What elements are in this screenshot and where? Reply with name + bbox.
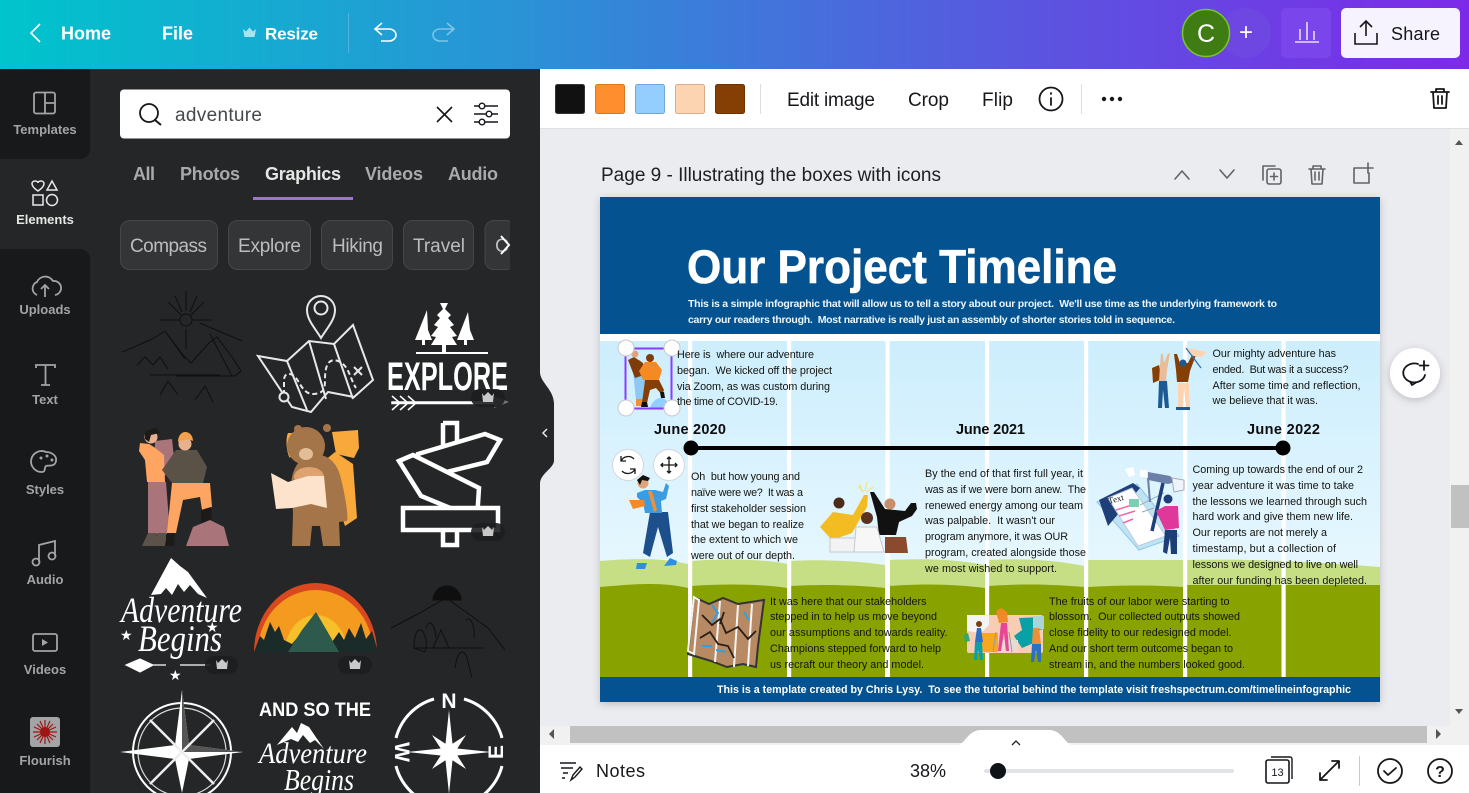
text block: young and naive: Oh but how young and: [691, 471, 800, 483]
text block: first full year: was palpable. It wasn't our: [924, 515, 1055, 527]
icon: check: [1378, 759, 1402, 783]
text item: Text: [32, 392, 59, 407]
icon: fullscreen: [1320, 761, 1339, 780]
text block: first full year: [924, 468, 1086, 575]
image toolbar: [540, 69, 1469, 129]
graphic: folded map with pin: [258, 296, 373, 412]
illustration: puzzle team: [964, 608, 1044, 662]
flourish item: Flourish: [19, 753, 71, 768]
text block: stakeholders stepped in: stepped in to help us move beyond: [770, 611, 937, 623]
page title: Page 9 - Illustrating the boxes with icons: [601, 165, 941, 186]
text block: young and naive: that we began to realize: [691, 519, 804, 531]
illustration: reports laptop: Text: [1107, 492, 1125, 506]
uploads item: Uploads: [19, 302, 71, 317]
icon: help: [1428, 759, 1452, 783]
graphic: compass with letters: W: [390, 742, 413, 762]
top navigation bar: [0, 0, 1469, 69]
icon: more dots: [1102, 97, 1122, 101]
canvas background: [540, 128, 1469, 793]
text block: lessons learned: Our reports are not merely a: [1192, 527, 1327, 539]
zoom slider: [984, 763, 1234, 779]
graphic: explore badge: EXPLORE: [387, 355, 508, 399]
date labels: June 2021: [956, 422, 1025, 438]
text block: first full year: program, created alongside those: [925, 547, 1086, 559]
text block: mighty adventure ended: [1212, 348, 1360, 407]
intro text: carry our readers through. Most narrative is really just an assembly of shorter stories told in sequence.: [688, 314, 1175, 326]
bottom status bar: [540, 730, 1469, 793]
keyword chips: Hiking: [332, 236, 383, 257]
icon: clear: [437, 107, 452, 122]
text block: fruits of labor: And our short term outcomes began to: [1049, 643, 1233, 655]
badge: premium crown: [205, 656, 238, 674]
graphic: sunset mountains: [254, 583, 378, 652]
avatar and add button: C: [1197, 20, 1215, 48]
text block: lessons learned: after our funding has been depleted.: [1192, 575, 1367, 587]
text block: fruits of labor: stream in, and the numbers looked good.: [1049, 659, 1245, 671]
graphic: and so the adventure begins: AND SO THE: [259, 700, 371, 721]
text block: fruits of labor: The fruits of our labor were starting to: [1049, 596, 1230, 608]
home label: Home: [61, 24, 111, 44]
elements item: [16, 181, 74, 227]
comment button: [1390, 348, 1440, 398]
icon: undo: [375, 23, 396, 41]
templates item: [13, 92, 77, 137]
graphic: compass rose: [120, 690, 243, 793]
text block: stakeholders stepped in: us recraft our theory and model.: [770, 659, 924, 671]
avatar and add button: +: [1239, 19, 1253, 46]
footer band: [600, 677, 1380, 702]
text block: adventure began: Here is where our adventure: [677, 349, 814, 361]
graphic: and so the adventure begins: Adventure: [257, 737, 367, 770]
selection frame with handles: [618, 340, 680, 416]
templates item: Templates: [13, 122, 77, 137]
audio item: Audio: [27, 572, 63, 587]
graphics results grid: [119, 291, 509, 793]
crop button: Crop: [908, 90, 949, 111]
text block: mighty adventure ended: ended. But was it a success?: [1212, 364, 1348, 376]
text block: young and naive: first stakeholder session: [691, 503, 806, 515]
text block: fruits of labor: blossom. Our collected outputs showed: [1049, 611, 1240, 623]
badge: premium crown: [338, 656, 372, 674]
text block: adventure began: began. We kicked off the project: [677, 365, 832, 377]
page controls: [1175, 163, 1373, 184]
icon: redo: [433, 23, 454, 41]
keyword chips: Travel: [413, 236, 465, 257]
icon: crown: [243, 28, 256, 37]
badge: premium crown: [471, 389, 505, 407]
analytics button: [1281, 8, 1331, 58]
keyword chips: Compass: [130, 236, 207, 257]
illustration: treasure map: [688, 597, 764, 667]
illustration: reports laptop: [1097, 467, 1184, 554]
text block: adventure began: [677, 349, 832, 408]
styles item: [26, 451, 64, 497]
category tabs: Graphics: [265, 164, 341, 184]
text block: young and naive: naïve were we? It was a: [691, 487, 803, 499]
text block: mighty adventure ended: we believe that it was.: [1212, 395, 1318, 407]
graphic: hikers: [139, 428, 229, 546]
share button: Share: [1391, 24, 1440, 44]
graphic: compass with letters: [390, 690, 508, 793]
flip button: Flip: [982, 90, 1013, 111]
graphic: wooden signpost: [399, 423, 500, 545]
text block: stakeholders stepped in: [770, 596, 948, 671]
icon: magnifier: [155, 120, 161, 125]
keyword chips: Explore: [238, 236, 301, 257]
text block: stakeholders stepped in: our assumptions and towards reality.: [770, 627, 948, 639]
notes label: Notes: [596, 761, 645, 781]
graphic: adventure begins script: ★: [169, 667, 182, 683]
rotate handle: [612, 450, 644, 480]
illustration: two climbers with flag: [1152, 348, 1207, 410]
search box: [120, 90, 510, 138]
text block: mighty adventure ended: After some time and reflection,: [1212, 380, 1360, 392]
sidebar collapse handle: [540, 373, 554, 483]
resize label: Resize: [265, 24, 318, 44]
text block: lessons learned: [1192, 464, 1367, 587]
text block: young and naive: were out of our depth.: [690, 550, 795, 562]
videos item: [24, 634, 66, 677]
icon: caret up: [1012, 741, 1020, 745]
text block: lessons learned: Coming up towards the end of our 2: [1192, 464, 1363, 476]
text block: fruits of labor: close fidelity to our redesigned model.: [1049, 627, 1232, 639]
elements item: Elements: [16, 212, 74, 227]
graphic: adventure begins script: ★: [206, 619, 219, 635]
category tabs: [133, 164, 498, 200]
intro text: [688, 298, 1277, 326]
graphic: adventure begins script: Adventure: [119, 590, 242, 630]
date labels: June 2020: [654, 422, 726, 438]
graphic: line mountains and sun: [122, 291, 242, 402]
text block: fruits of labor: [1049, 596, 1245, 671]
text block: first full year: we most wished to support.: [924, 563, 1057, 575]
graphic: and so the adventure begins: [257, 700, 371, 793]
graphic: bear with map: [271, 424, 359, 546]
timeline axis: [684, 440, 1290, 456]
text block: young and naive: the extent to which we: [691, 534, 798, 546]
header band: [600, 197, 1380, 334]
videos item: Videos: [24, 662, 66, 677]
graphic: adventure begins script: [119, 558, 242, 683]
text block: young and naive: [690, 471, 806, 562]
share button: [1341, 8, 1460, 58]
text block: lessons learned: timestamp, but a collection of: [1192, 543, 1337, 555]
text block: mighty adventure ended: Our mighty adventure has: [1212, 348, 1337, 360]
uploads item: [19, 277, 71, 317]
icon: delete: [1431, 89, 1449, 108]
graphic: adventure begins script: Begins: [138, 619, 222, 660]
move handle: [654, 450, 684, 480]
graphic: explore badge: [387, 293, 509, 410]
date labels: June 2022: [1247, 422, 1320, 438]
colour swatches: [556, 84, 744, 114]
text block: stakeholders stepped in: It was here that our stakeholders: [770, 596, 927, 608]
keyword chips: C: [495, 236, 509, 257]
category tabs: Photos: [180, 164, 240, 184]
flourish item: [19, 717, 71, 768]
text block: adventure began: via Zoom, as was custom during: [677, 381, 830, 393]
main title: Our Project Timeline: [687, 240, 1117, 293]
file label: File: [162, 24, 193, 44]
text block: first full year: renewed energy among our team: [925, 500, 1083, 512]
page header row: [601, 163, 1373, 186]
text block: first full year: was as if we were born anew. The: [924, 484, 1086, 496]
page count: 13: [1271, 767, 1284, 779]
icon: filters: [474, 103, 498, 125]
text block: stakeholders stepped in: Champions stepped forward to help: [770, 643, 941, 655]
vertical scrollbar: [1450, 129, 1469, 726]
avatar and add button: [1182, 8, 1271, 58]
icon: notes: [560, 763, 582, 780]
date labels: [654, 422, 1320, 438]
search query: adventure: [175, 105, 262, 126]
text block: adventure began: the time of COVID-19.: [677, 396, 778, 408]
category tabs: Videos: [365, 164, 423, 184]
footer band: This is a template created by Chris Lysy. To see the tutorial behind the template visit freshspectrum.com/timelineinfographic: [717, 684, 1351, 696]
styles item: Styles: [26, 482, 64, 497]
illustration: two hikers, selected: [628, 350, 669, 408]
infographic page: [600, 197, 1380, 702]
left sidebar: [0, 69, 540, 793]
horizontal scrollbar: [540, 726, 1469, 745]
edit image button: Edit image: [787, 90, 875, 111]
page count: [1266, 757, 1292, 783]
keyword chips: [120, 215, 540, 275]
text block: lessons learned: hard work and give them new life.: [1192, 511, 1353, 523]
category tabs: All: [133, 164, 155, 184]
text block: lessons learned: the lessons we learned through such: [1192, 496, 1367, 508]
graphic: adventure begins script: ★: [120, 627, 133, 643]
audio item: [27, 541, 63, 587]
toolbar divider: [348, 13, 349, 53]
sky and hills background: [600, 341, 1380, 677]
graphic: compass with letters: E: [485, 745, 508, 759]
icon: info: [1040, 88, 1062, 110]
notes panel tab: [955, 730, 1075, 746]
text item: [32, 365, 59, 407]
badge: premium crown: [471, 523, 505, 541]
text block: first full year: By the end of that first full year, it: [925, 468, 1083, 480]
graphic: compass with letters: N: [441, 690, 457, 713]
category tabs: Audio: [448, 164, 498, 184]
intro text: This is a simple infographic that will allow us to tell a story about our project. We'll use time as the underlying framework to: [688, 298, 1277, 310]
icon: help: ?: [1435, 764, 1445, 781]
graphic: line tent scene: [391, 586, 505, 678]
illustration: man with tablet: [629, 475, 677, 569]
text block: first full year: program anymore, it was OUR: [925, 531, 1068, 543]
icon: back chevron: [31, 24, 40, 42]
text block: lessons learned: year adventure it was time to take: [1192, 480, 1354, 492]
text block: lessons learned: lessons we designed to live on well: [1192, 559, 1358, 571]
illustration: three people high five: [820, 482, 917, 553]
zoom percentage: 38%: [910, 761, 946, 781]
